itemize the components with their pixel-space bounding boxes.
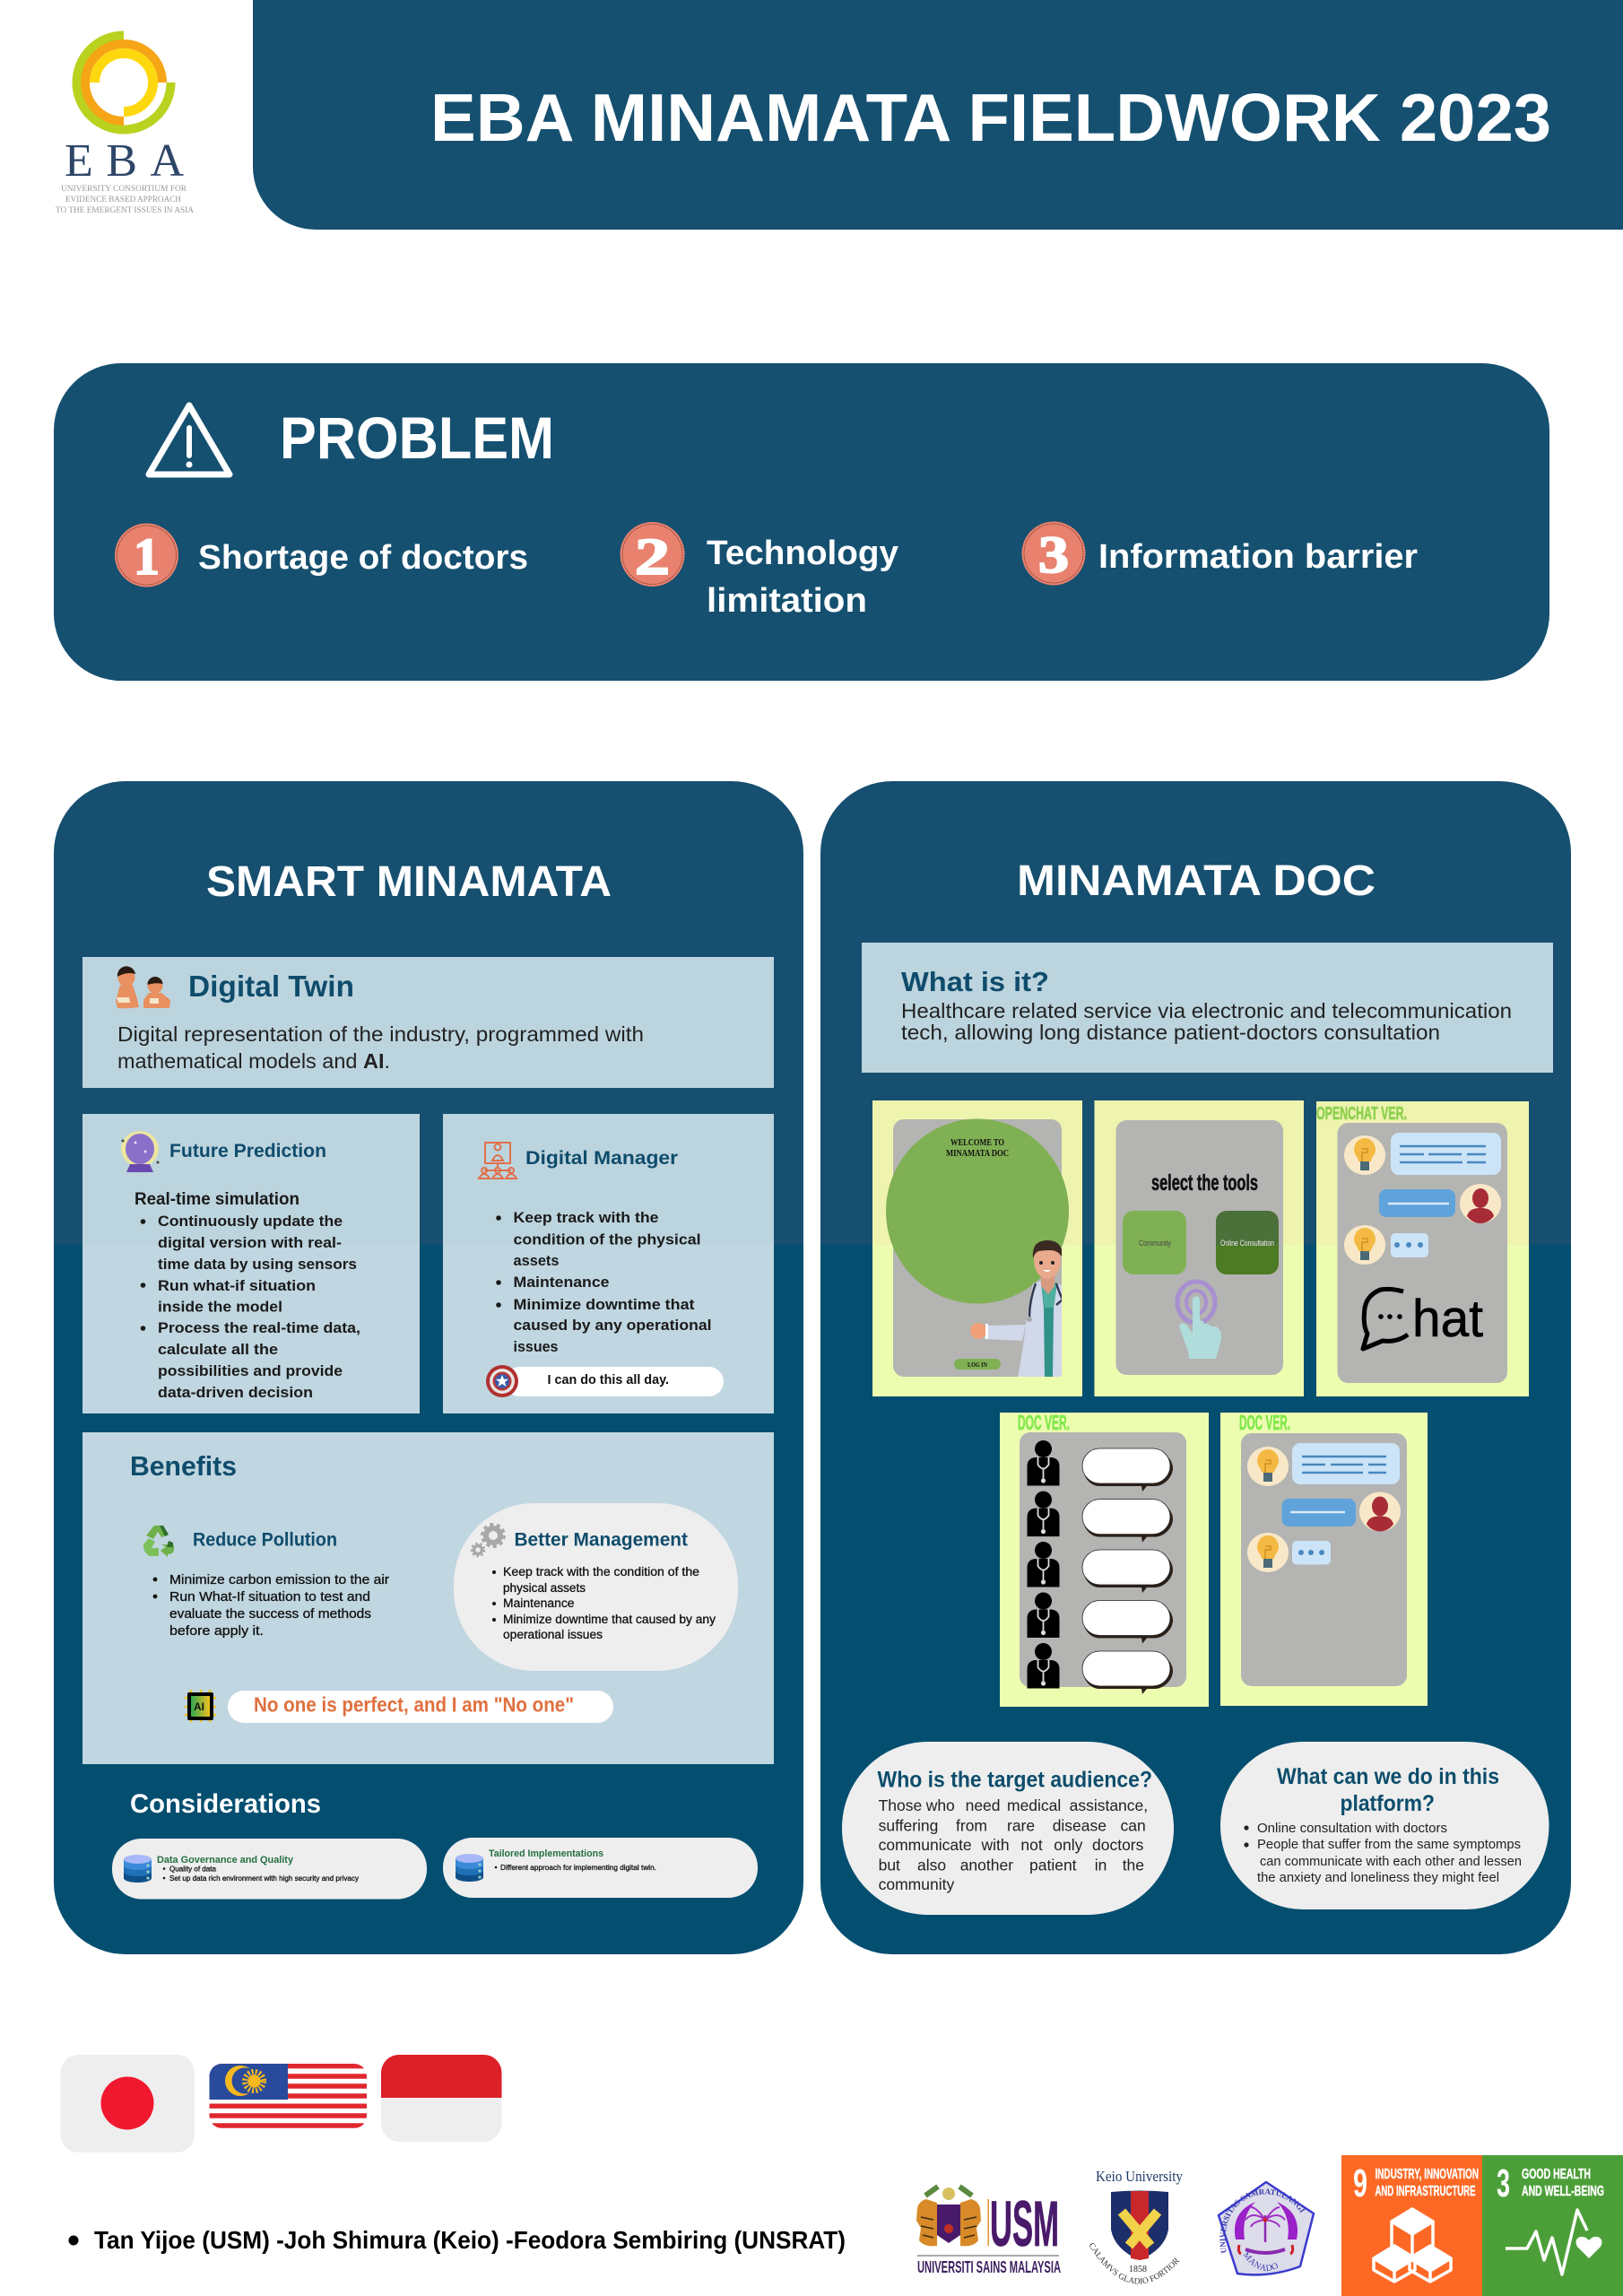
text: target audience description: suffering bbox=[879, 1817, 942, 1835]
logo: universitas samratulangi: UNIVERSITAS SAMRATULANGI bbox=[1219, 2188, 1306, 2253]
heading: reduce pollution: Reduce Pollution bbox=[193, 1530, 337, 1550]
bullets: reduce pollution: Run What-If situation to test and bbox=[169, 1589, 370, 1605]
card: target audience bbox=[842, 1742, 1174, 1915]
panel: smart minamata bbox=[54, 781, 803, 1954]
logo: EBA consortium: UNIVERSITY CONSORTIUM FOR bbox=[61, 185, 187, 194]
logo: EBA consortium bbox=[56, 36, 194, 215]
mockup: select the tools bbox=[1094, 1100, 1304, 1396]
mockup: doctor list: DOC VER. bbox=[1018, 1411, 1070, 1434]
card: what is it: tech, allowing long distance patient-doctors consultation bbox=[901, 1021, 1440, 1044]
sdg 9: industry: INDUSTRY, INNOVATION bbox=[1376, 2167, 1479, 2182]
text: target audience description: the bbox=[1123, 1857, 1144, 1874]
text: target audience description bbox=[879, 1796, 1148, 1893]
text: target audience description: doctors bbox=[1092, 1836, 1144, 1854]
text: target audience description: but bbox=[879, 1857, 905, 1874]
logo: universiti sains malaysia: USM bbox=[990, 2189, 1059, 2260]
text: target audience description: community bbox=[879, 1875, 954, 1893]
text: target audience description: rare bbox=[1007, 1817, 1039, 1835]
icon: ai chip: AI bbox=[194, 1700, 204, 1713]
icon: twin babies bbox=[116, 966, 170, 1008]
mockup: select the tools: Online Consultation bbox=[1220, 1239, 1274, 1248]
card: digital manager bbox=[443, 1114, 774, 1413]
sdg 9: industry: AND INFRASTRUCTURE bbox=[1376, 2184, 1476, 2199]
text: target audience description: from bbox=[956, 1817, 992, 1835]
bullets: reduce pollution: before apply it. bbox=[169, 1623, 264, 1639]
bullets: platform features: People that suffer from the same symptomps bbox=[1257, 1837, 1521, 1852]
text: target audience description: patient bbox=[1029, 1857, 1081, 1874]
bullets: digital manager: Minimize downtime that bbox=[513, 1296, 695, 1313]
icon: tap hand bbox=[1177, 1282, 1221, 1359]
text: target audience description: Those bbox=[879, 1796, 926, 1814]
problem 2 bbox=[621, 522, 898, 620]
logo: EBA consortium: TO THE EMERGENT ISSUES IN ASIA bbox=[56, 206, 194, 215]
mockup: welcome screen: MINAMATA DOC bbox=[946, 1148, 1009, 1159]
bullets: reduce pollution: Minimize carbon emission to the air bbox=[169, 1572, 389, 1587]
header banner bbox=[253, 0, 1623, 230]
pill: tailored implementations bbox=[443, 1838, 758, 1898]
logo: universiti sains malaysia bbox=[916, 2187, 1061, 2276]
flag: japan bbox=[61, 2055, 195, 2152]
heading: digital manager: Digital Manager bbox=[525, 1148, 678, 1169]
heading: smart minamata: SMART MINAMATA bbox=[206, 858, 612, 906]
logo: EBA consortium: EBA bbox=[65, 135, 184, 187]
bullets: digital manager bbox=[496, 1209, 712, 1355]
text: target audience description: another bbox=[960, 1857, 1018, 1874]
problem 2: 2 bbox=[635, 527, 670, 586]
pill: data governance and quality bbox=[112, 1839, 427, 1900]
mockup: select the tools: select the tools bbox=[1151, 1170, 1258, 1196]
bullets: platform features: can communicate with each other and lessen bbox=[1260, 1854, 1522, 1869]
logo: keio university bbox=[1089, 2168, 1183, 2283]
text: target audience description: need bbox=[966, 1796, 1004, 1814]
bullets: better management: Keep track with the condition of the bbox=[503, 1565, 699, 1578]
mockup: doctor chat bbox=[1220, 1411, 1428, 1706]
logo: universitas samratulangi: MANADO bbox=[1243, 2251, 1278, 2271]
text: target audience description: who bbox=[925, 1796, 959, 1814]
problem 1: 1 bbox=[134, 527, 160, 586]
mockup: doctor chat: DOC VER. bbox=[1239, 1411, 1290, 1434]
card: what can we do bbox=[1220, 1742, 1549, 1909]
icon: recycle bbox=[143, 1526, 174, 1557]
logo: universiti sains malaysia: UNIVERSITI SAINS MALAYSIA bbox=[917, 2258, 1061, 2276]
text: digital twin description bbox=[117, 1022, 644, 1073]
bullets: digital manager: caused by any operational bbox=[513, 1317, 712, 1334]
logo: EBA consortium: EVIDENCE BASED APPROACH bbox=[65, 196, 181, 204]
text: target audience description: communicate bbox=[879, 1836, 976, 1854]
callout: i can do this all day bbox=[486, 1365, 724, 1397]
card: what is it bbox=[862, 943, 1553, 1073]
card: digital twin bbox=[82, 957, 774, 1088]
problem 3: 3 bbox=[1038, 526, 1069, 584]
problem 3: Information barrier bbox=[1098, 538, 1418, 576]
bullets: better management: Minimize downtime that caused by any bbox=[503, 1613, 716, 1626]
pill: tailored implementations: Tailored Implementations bbox=[489, 1848, 603, 1859]
card: what can we do: platform? bbox=[1340, 1791, 1435, 1816]
mockup: welcome screen: WELCOME TO bbox=[950, 1137, 1004, 1148]
card: better management bbox=[454, 1503, 738, 1671]
icon: manager hierarchy bbox=[479, 1143, 516, 1178]
bullets: future prediction: digital version with real- bbox=[158, 1234, 342, 1251]
icon: chat logo bbox=[1363, 1289, 1483, 1349]
flag: indonesia bbox=[381, 2055, 502, 2142]
pill: data governance and quality: Data Governance and Quality bbox=[157, 1855, 294, 1866]
logo: keio university: Keio University bbox=[1096, 2168, 1183, 2185]
text: real-time simulation: Real-time simulation bbox=[135, 1190, 299, 1209]
text: target audience description: also bbox=[917, 1857, 950, 1874]
bullets: future prediction bbox=[141, 1213, 360, 1401]
bullets: future prediction: Process the real-time data, bbox=[158, 1319, 360, 1336]
problem 3 bbox=[1022, 522, 1418, 585]
icon: heartbeat bbox=[1506, 2210, 1601, 2274]
bullets: future prediction: time data by using sensors bbox=[158, 1256, 357, 1273]
bullets: digital manager: assets bbox=[513, 1252, 560, 1269]
sdg 3: good health bbox=[1482, 2155, 1623, 2296]
callout: no one is perfect bbox=[228, 1691, 613, 1723]
bullets: future prediction: Continuously update the bbox=[158, 1213, 343, 1230]
icon: gears bbox=[472, 1525, 504, 1556]
logo: keio university: 1858 bbox=[1129, 2265, 1147, 2274]
problem 2: limitation bbox=[707, 582, 867, 620]
bullets: reduce pollution bbox=[153, 1572, 389, 1639]
heading: better management: Better Management bbox=[515, 1530, 688, 1550]
sdg 9: industry: 9 bbox=[1353, 2161, 1367, 2205]
card: what can we do: What can we do in this bbox=[1277, 1764, 1499, 1789]
bullets: better management: physical assets bbox=[503, 1581, 586, 1595]
icon: ai chip bbox=[185, 1690, 216, 1722]
sdg 3: good health: 3 bbox=[1497, 2161, 1510, 2205]
problem 2: Technology bbox=[707, 535, 898, 572]
heading: considerations: Considerations bbox=[130, 1789, 321, 1819]
heading: digital twin: Digital Twin bbox=[188, 970, 354, 1003]
problem 1 bbox=[115, 524, 528, 587]
bullets: future prediction: possibilities and provide bbox=[158, 1362, 343, 1379]
text: digital twin description: Digital representation of the industry, programmed with bbox=[117, 1022, 644, 1046]
bullets: reduce pollution: evaluate the success of methods bbox=[169, 1606, 371, 1622]
icon: warning triangle bbox=[149, 405, 230, 474]
text: digital twin description: mathematical models and AI. bbox=[117, 1049, 390, 1073]
bullets: future prediction: inside the model bbox=[158, 1299, 282, 1315]
bullets: future prediction: calculate all the bbox=[158, 1341, 278, 1358]
mockup: welcome screen bbox=[872, 1100, 1082, 1396]
mockup: openchat version: OPENCHAT VER. bbox=[1316, 1104, 1407, 1124]
icon: cubes bbox=[1374, 2209, 1451, 2282]
text: target audience description: with bbox=[981, 1836, 1013, 1854]
text: target audience description: in bbox=[1095, 1857, 1111, 1874]
card: what is it: What is it? bbox=[901, 966, 1049, 997]
icon: chat logo: hat bbox=[1412, 1290, 1483, 1348]
callout: i can do this all day: I can do this all day. bbox=[547, 1372, 669, 1387]
bullets: platform features: the anxiety and loneliness they might feel bbox=[1257, 1870, 1499, 1885]
mockup: select the tools: Community bbox=[1139, 1239, 1171, 1248]
card: benefits bbox=[82, 1432, 774, 1764]
bullets: better management: Maintenance bbox=[503, 1596, 574, 1610]
bullets: future prediction: Run what-if situation bbox=[158, 1277, 316, 1294]
icon: crystal ball bbox=[121, 1131, 160, 1172]
text: target audience description: not bbox=[1020, 1836, 1047, 1854]
heading: future prediction: Future Prediction bbox=[169, 1141, 326, 1161]
card: future prediction bbox=[82, 1114, 420, 1413]
bullets: better management: operational issues bbox=[503, 1628, 603, 1641]
card: target audience: Who is the target audience? bbox=[877, 1767, 1152, 1792]
bullets: digital manager: Maintenance bbox=[513, 1274, 610, 1291]
heading: benefits: Benefits bbox=[130, 1450, 237, 1482]
logo: universitas samratulangi bbox=[1218, 2181, 1315, 2276]
text: target audience description: medical bbox=[1007, 1796, 1065, 1814]
bullets: platform features: Online consultation with doctors bbox=[1257, 1821, 1447, 1836]
text: target audience description: assistance, bbox=[1070, 1796, 1148, 1814]
pill: data governance and quality: Quality of data bbox=[169, 1866, 217, 1873]
bullets: platform features bbox=[1244, 1821, 1522, 1885]
bullets: future prediction: data-driven decision bbox=[158, 1384, 313, 1401]
text: target audience description: disease bbox=[1053, 1817, 1111, 1835]
panel: minamata doc bbox=[820, 781, 1571, 1954]
problem 1: Shortage of doctors bbox=[198, 539, 528, 577]
sdg 9: industry bbox=[1341, 2155, 1482, 2296]
logo: keio university: CALAMVS GLADIO FORTIOR bbox=[1089, 2243, 1180, 2283]
text: target audience description: only bbox=[1054, 1836, 1087, 1854]
text: target audience description: can bbox=[1121, 1817, 1146, 1835]
illustration: doctor bbox=[970, 1240, 1065, 1377]
panel: problem bbox=[54, 363, 1549, 681]
bullets: digital manager: condition of the physical bbox=[513, 1231, 701, 1248]
text: authors: Tan Yijoe (USM) -Joh Shimura (Keio) -Feodora Sembiring (UNSRAT) bbox=[94, 2226, 846, 2254]
bullets: digital manager: Keep track with the bbox=[513, 1209, 658, 1226]
mockup: welcome screen: LOG IN bbox=[968, 1361, 987, 1369]
heading: problem: PROBLEM bbox=[280, 404, 554, 471]
heading: minamata doc: MINAMATA DOC bbox=[1017, 857, 1376, 905]
card: what is it: Healthcare related service via electronic and telecommunication bbox=[901, 999, 1512, 1022]
bullets: digital manager: issues bbox=[513, 1338, 558, 1355]
callout: no one is perfect: No one is perfect, and I am "No one" bbox=[254, 1693, 574, 1717]
mockup: openchat version bbox=[1316, 1101, 1529, 1396]
flag: malaysia bbox=[210, 2064, 367, 2128]
title: EBA MINAMATA FIELDWORK 2023 bbox=[430, 80, 1551, 155]
mockup: doctor list bbox=[1000, 1411, 1209, 1707]
pill: tailored implementations: Different approach for implementing digital twin. bbox=[500, 1864, 656, 1872]
pill: data governance and quality: Set up data rich environment with high security and privacy bbox=[169, 1874, 359, 1883]
bullets: better management bbox=[492, 1565, 716, 1641]
